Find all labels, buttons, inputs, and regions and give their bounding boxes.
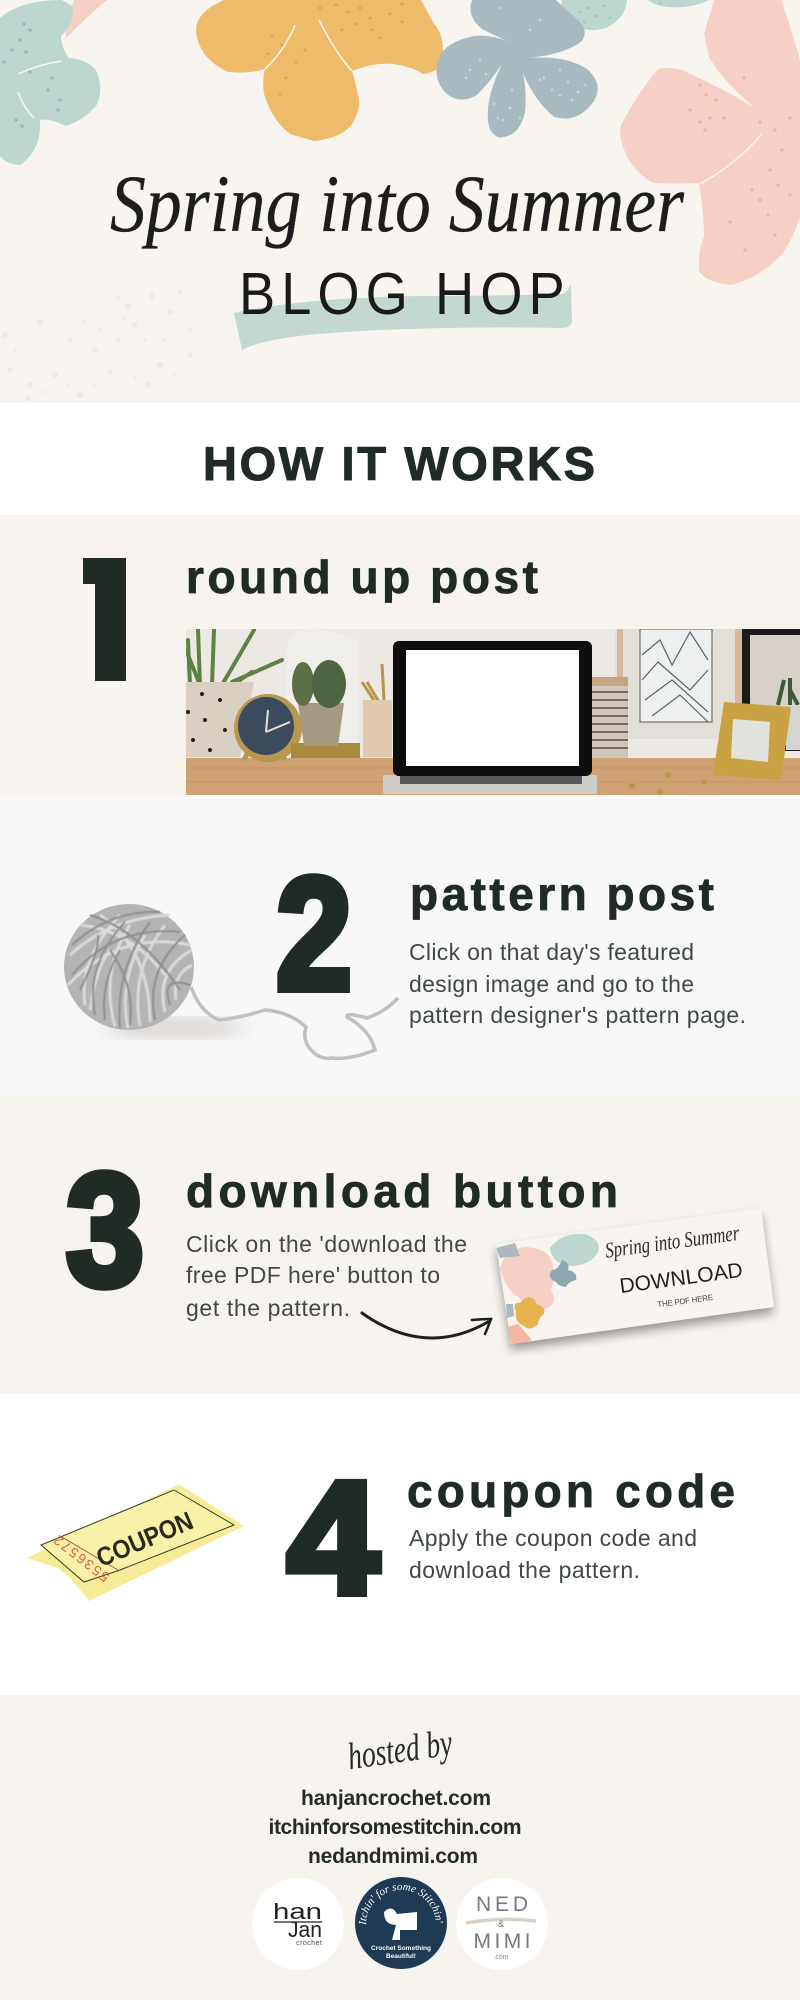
logo: han jan crochet: crochet <box>296 1938 323 1947</box>
photo: yellow coupon: 5536572 <box>50 1532 112 1585</box>
button text: THE PDF HERE <box>657 1293 714 1309</box>
black frame <box>742 629 800 751</box>
glass dome <box>286 629 358 745</box>
panel: step 3 download button <box>0 1095 800 1394</box>
panel: step 1 round up post: 1 <box>95 495 126 674</box>
flower: pink top-left <box>66 0 107 38</box>
script heading: hosted by <box>345 1722 455 1778</box>
number 2: 2 <box>276 844 352 1023</box>
flower: yellow <box>196 0 443 141</box>
body text: pattern designer's pattern page. <box>409 1002 746 1028</box>
grey speckle texture <box>5 292 190 398</box>
button text: Spring into Summer <box>604 1220 741 1263</box>
clock <box>234 694 302 762</box>
panel: step 1 round up post <box>0 495 800 795</box>
number 1 <box>83 558 126 681</box>
logo: han jan crochet: han <box>273 1899 322 1924</box>
panel: step 4 coupon code <box>0 1394 800 1695</box>
body text: free PDF here' button to <box>186 1262 440 1288</box>
photo: yellow coupon <box>27 1484 244 1601</box>
laptop <box>383 775 597 794</box>
button text <box>604 1220 748 1315</box>
body text: design image and go to the <box>409 971 694 997</box>
heading: pattern post <box>410 868 714 920</box>
website list: hanjancrochet.com <box>301 1787 491 1810</box>
body text: download the pattern. <box>409 1557 640 1583</box>
heading: how it works <box>0 403 800 515</box>
logo: ned and mimi: & <box>498 1919 504 1929</box>
flower: blue-grey <box>436 0 598 138</box>
body text <box>186 1231 467 1321</box>
striped jar <box>592 686 628 758</box>
logo: ned and mimi <box>456 1878 548 1970</box>
heading: how it works: HOW IT WORKS <box>203 437 595 490</box>
panel: footer hosted by <box>0 1695 800 2000</box>
cactus pot <box>291 743 360 758</box>
logo: han jan crochet: Jan <box>288 1917 322 1942</box>
logo: han jan crochet <box>252 1878 344 1970</box>
photo: yellow coupon: COUPON <box>92 1505 197 1573</box>
website list: itchinforsomestitchin.com <box>268 1816 522 1839</box>
pencil holder <box>362 664 384 702</box>
logo: ned and mimi: MIMI <box>474 1930 530 1953</box>
body text: Click on the 'download the <box>186 1231 467 1257</box>
heading: download button <box>186 1165 618 1217</box>
heading: round up post <box>186 551 538 603</box>
body text <box>409 1525 697 1583</box>
logo: itchin for some stitchin: Beautiful! <box>386 1953 416 1960</box>
number 3: 3 <box>66 1140 144 1319</box>
number 4: 4 <box>287 1448 379 1627</box>
flower: pink right <box>620 0 800 285</box>
panel: step 2 pattern post <box>0 795 800 1095</box>
heading: coupon code <box>407 1465 735 1517</box>
logo: ned and mimi: .com <box>493 1954 509 1961</box>
binder clips <box>632 775 704 792</box>
photo: desk with laptop <box>186 629 800 795</box>
logo: itchin for some stitchin <box>355 1877 447 1969</box>
gold photo frame <box>713 702 791 780</box>
body text: Apply the coupon code and <box>409 1525 697 1551</box>
teal swash <box>234 284 572 350</box>
logo: itchin for some stitchin: Itchin' for some Stitchin' <box>358 1884 444 1925</box>
flower: small teal top <box>561 0 709 30</box>
logo: ned and mimi: NED <box>476 1893 528 1916</box>
website list <box>268 1787 522 1868</box>
body text <box>409 939 746 1028</box>
flower: teal left <box>0 0 100 165</box>
arrow <box>362 1313 491 1338</box>
button text: DOWNLOAD <box>618 1259 744 1298</box>
logo: itchin for some stitchin: Crochet Something <box>371 1945 431 1952</box>
fabric bag <box>186 682 254 757</box>
header panel <box>0 0 800 404</box>
photo: ball of yarn <box>64 904 398 1058</box>
title: BLOG HOP: BLOG HOP <box>239 262 565 328</box>
aloe plant <box>186 629 282 685</box>
framed print <box>615 629 740 739</box>
website list: nedandmimi.com <box>308 1845 478 1868</box>
yarn thread <box>191 987 398 1058</box>
title: Spring into Summer: Spring into Summer <box>110 158 685 249</box>
button flowers <box>496 1234 599 1346</box>
body text: Click on that day's featured <box>409 939 694 965</box>
body text: get the pattern. <box>186 1295 350 1321</box>
button preview <box>496 1208 774 1350</box>
